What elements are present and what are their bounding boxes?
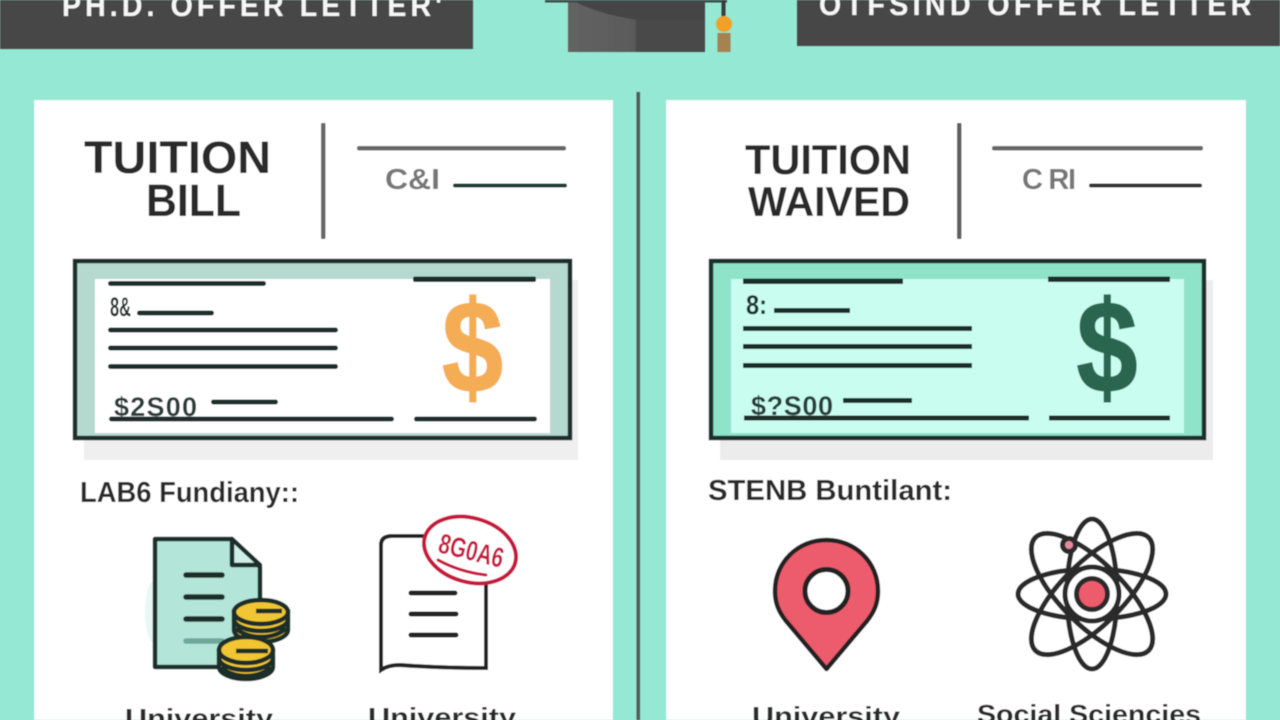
icon: graduation cap xyxy=(545,0,732,52)
left banner xyxy=(0,0,473,49)
right banner xyxy=(797,0,1280,46)
header divider and signature lines: C RI xyxy=(1022,164,1076,196)
label: stem funding: STENB Buntilant: xyxy=(708,475,952,507)
check: bill: 8& xyxy=(110,292,131,322)
header divider and signature lines xyxy=(321,123,567,239)
heading: tuition waived: WAIVED xyxy=(748,178,910,225)
icon: green dollar: $ xyxy=(1076,274,1138,420)
check: bill xyxy=(75,261,578,460)
heading: tuition bill xyxy=(84,132,271,226)
panel: tuition bill xyxy=(34,100,613,720)
icon: document with stamp xyxy=(381,506,524,670)
icon: document with stamp: 8G0A6 xyxy=(436,528,507,574)
center divider xyxy=(636,92,640,720)
icon: location pin xyxy=(775,540,878,669)
icon: document with coins xyxy=(145,539,288,679)
panel: tuition waived xyxy=(666,100,1246,720)
check: waived: 8: xyxy=(746,290,767,320)
check: waived xyxy=(711,261,1213,460)
icon: orange dollar: $ xyxy=(442,274,503,420)
header divider and signature lines: C&I xyxy=(385,164,440,196)
icon: atom xyxy=(1014,516,1170,672)
heading: tuition bill: TUITION xyxy=(84,132,271,183)
heading: tuition waived: TUITION xyxy=(745,136,911,183)
check: bill: $2S00 xyxy=(114,392,197,422)
check: waived: $?S00 xyxy=(751,391,833,421)
header divider and signature lines xyxy=(957,123,1203,239)
label: lab funding: LAB6 Fundiany:: xyxy=(80,477,299,509)
heading: tuition bill: BILL xyxy=(146,175,241,226)
heading: tuition waived xyxy=(745,136,911,225)
